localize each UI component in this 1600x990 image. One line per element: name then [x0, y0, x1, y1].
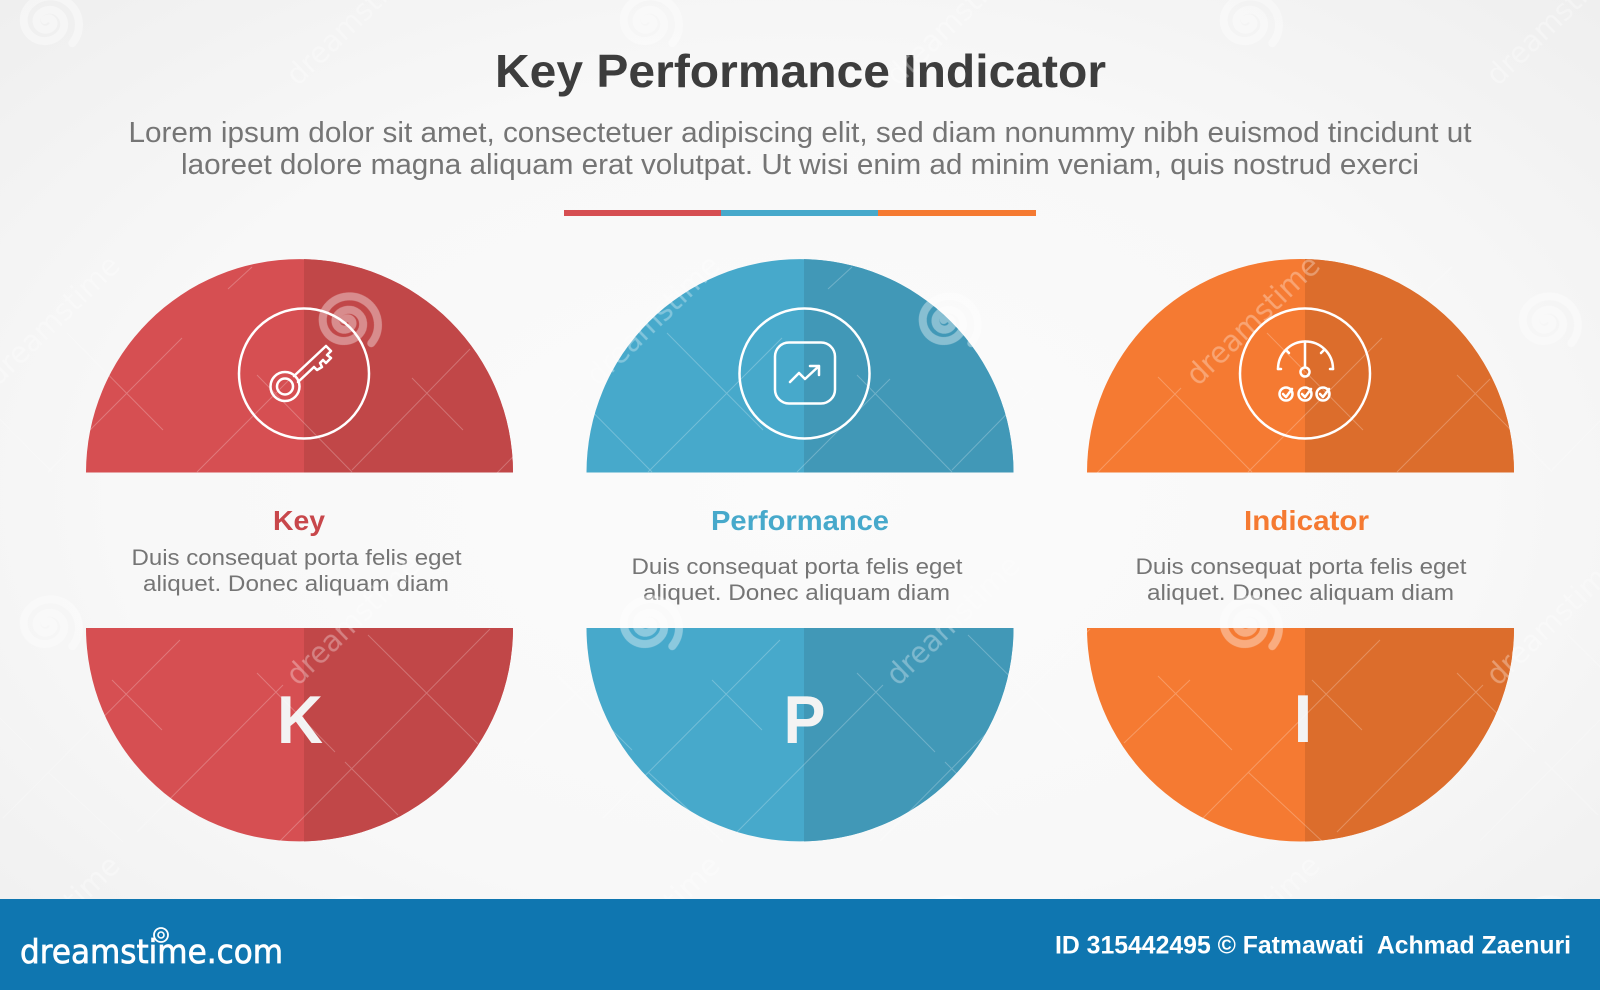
upper half disc: Performance — [586, 259, 1014, 472]
letter I: I — [1294, 681, 1312, 757]
description: Performance — [632, 554, 962, 605]
description: Key — [132, 545, 462, 596]
watermark overlay: dreamstime — [1179, 848, 1327, 990]
description: Indicator: Duis consequat porta felis eget — [1136, 554, 1466, 579]
description: Key: Duis consequat porta felis eget — [132, 545, 462, 570]
panel: Key — [86, 259, 513, 841]
description: Indicator — [1136, 554, 1466, 605]
panel: Indicator — [1087, 259, 1514, 841]
footer bar — [0, 899, 1600, 990]
description: Performance: Duis consequat porta felis eget — [632, 554, 962, 579]
lower half disc: Indicator — [1087, 628, 1514, 841]
description: Indicator: aliquet. Donec aliquam diam — [1147, 580, 1454, 605]
tricolour divider bar — [564, 210, 1036, 216]
icon: growth chart in circle — [740, 308, 870, 438]
icon: key in circle — [239, 308, 369, 438]
letter P: P — [784, 682, 826, 758]
description: Key: aliquet. Donec aliquam diam — [143, 571, 449, 596]
letter K: K — [277, 682, 323, 758]
description: Performance: aliquet. Donec aliquam diam — [643, 580, 950, 605]
subtitle text block: Lorem ipsum dolor sit amet, consectetuer adipiscing elit, sed diam nonummy nibh euismod tincidunt ut — [128, 117, 1472, 149]
footer logo: dreamstime.com — [20, 932, 283, 971]
watermark overlay: dreamstime — [1179, 248, 1327, 392]
watermark overlay: dreamstime — [579, 848, 727, 990]
upper half disc: Key — [86, 259, 513, 472]
panel: Performance — [586, 259, 1014, 841]
lower half disc: Key — [86, 628, 513, 841]
title: Key Performance Indicator — [495, 45, 1106, 97]
subtitle text block — [128, 117, 1472, 181]
icon: gauge with checks in circle — [1240, 308, 1370, 438]
heading: Key: Key — [273, 505, 325, 536]
lower half disc: Performance — [586, 628, 1014, 841]
upper half disc: Indicator — [1087, 259, 1514, 472]
heading: Indicator: Indicator — [1244, 505, 1369, 536]
subtitle text block: laoreet dolore magna aliquam erat volutpat. Ut wisi enim ad minim veniam, quis nostrud exerci — [181, 149, 1419, 181]
watermark overlay — [90, 55, 1513, 840]
footer credit: ID 315442495 © Fatmawati Achmad Zaenuri — [1055, 932, 1571, 960]
watermark overlay: dreamstime — [279, 548, 427, 692]
heading: Performance: Performance — [711, 505, 889, 536]
watermark overlay: dreamstime — [579, 248, 727, 392]
watermark overlay: dreamstime — [879, 548, 1027, 692]
